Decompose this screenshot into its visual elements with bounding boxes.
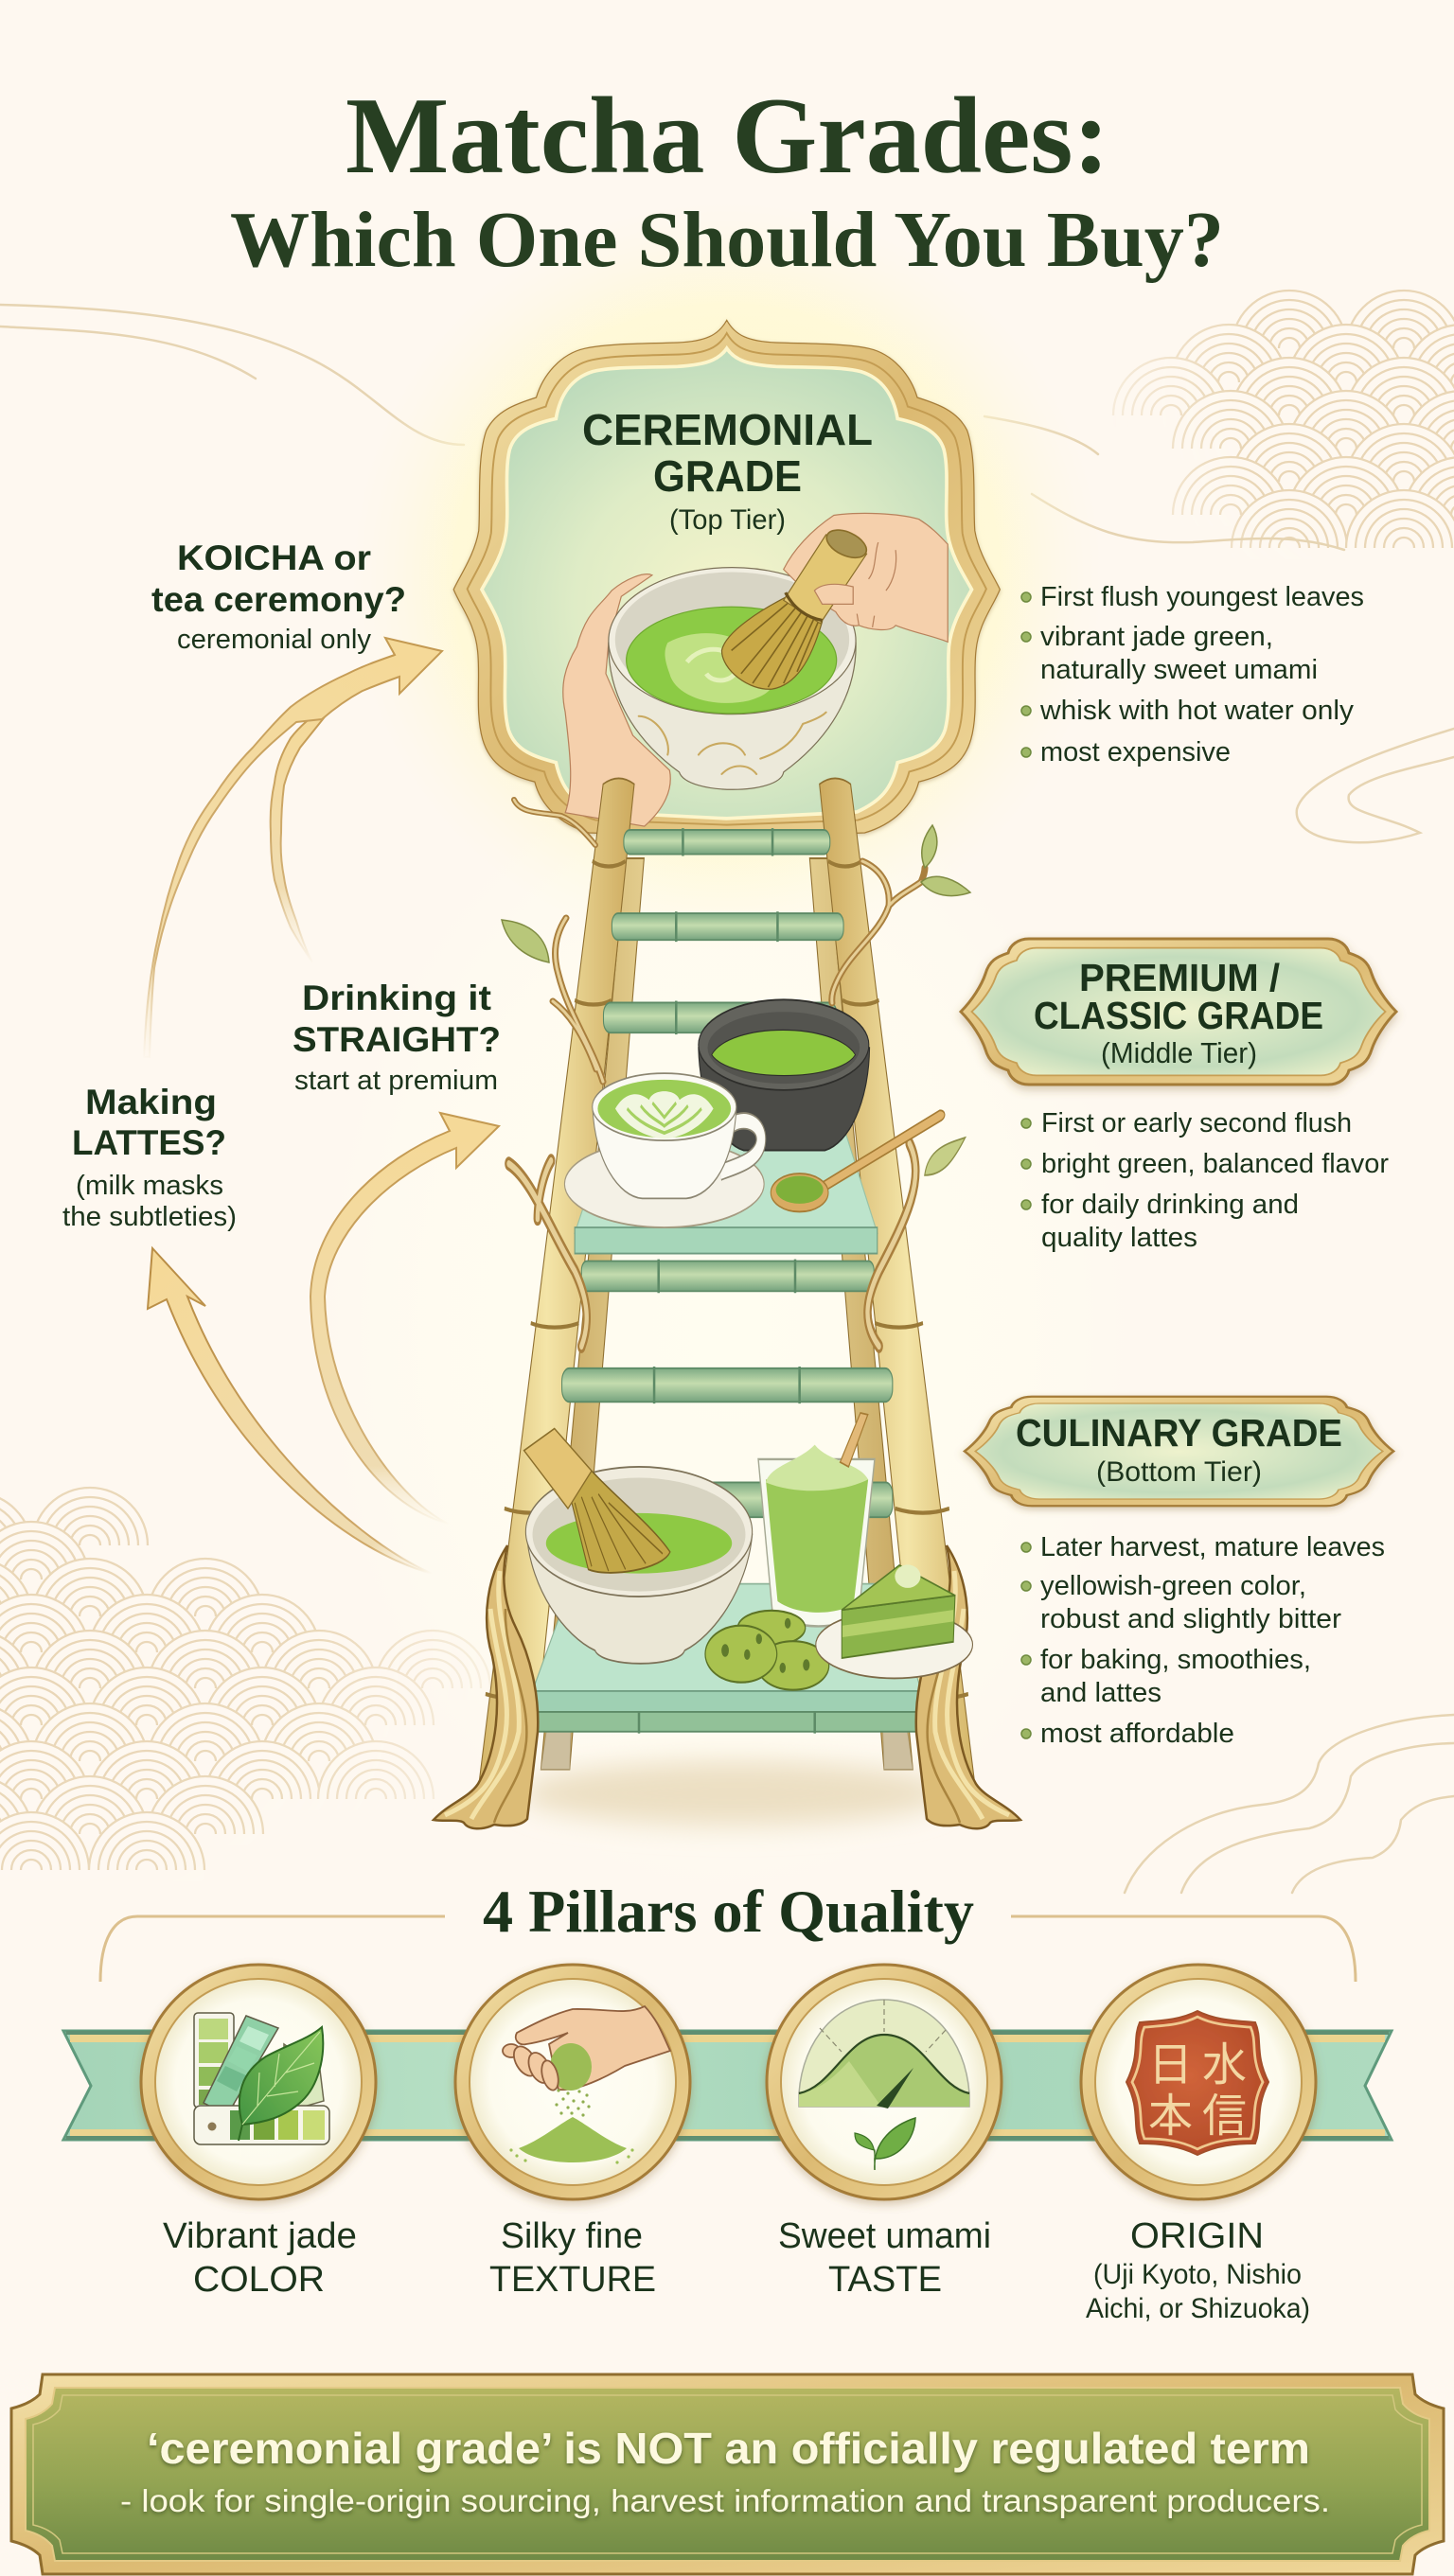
smoothie glass — [758, 1413, 875, 1626]
callout: koicha: KOICHA or — [177, 538, 371, 577]
panel: culinary badge — [965, 1397, 1393, 1506]
pillar: color medallion — [141, 1965, 376, 2199]
ceramic bowl — [609, 568, 856, 789]
title — [230, 76, 1224, 284]
root: left — [434, 1545, 538, 1828]
icon: red origin seal: 水 — [1202, 2040, 1247, 2091]
callout: drinking straight: STRAIGHT? — [293, 1020, 501, 1059]
icon: red origin seal — [1126, 2011, 1268, 2155]
list: ceremonial details: vibrant jade green, — [1040, 622, 1273, 652]
label: silky fine texture: Silky fine — [501, 2216, 643, 2256]
list: culinary details — [1021, 1532, 1385, 1749]
heading: 4 pillars of quality: 4 Pillars of Quality — [483, 1878, 974, 1945]
black tea bowl — [699, 999, 870, 1151]
label: silky fine texture: TEXTURE — [489, 2260, 656, 2300]
icon: taste gauge with leaf — [799, 2000, 969, 2170]
callout: koicha: ceremonial only — [177, 625, 371, 655]
callout: koicha — [151, 538, 406, 655]
back rung behind smoothie — [575, 1482, 893, 1517]
callout: making lattes: Making — [85, 1083, 217, 1121]
heading: ceremonial grade: CEREMONIAL — [582, 405, 873, 454]
wooden spoon with matcha — [771, 1110, 945, 1211]
list: premium details: bright green, balanced flavor — [1041, 1149, 1389, 1179]
flowing lines — [0, 305, 1454, 1893]
cake slice on plate — [816, 1564, 972, 1678]
list: culinary details: most affordable — [1040, 1719, 1234, 1749]
panel: culinary badge: (Bottom Tier) — [1096, 1456, 1262, 1488]
banner: regulation note — [11, 2374, 1444, 2574]
icon: middle leaf — [925, 1138, 966, 1175]
arrow: lattes up to ceremonial — [144, 638, 442, 1057]
label: origin — [1086, 2216, 1310, 2324]
green cookies — [705, 1611, 829, 1690]
icon: hand sprinkling powder — [503, 2006, 670, 2164]
wave pattern: lower left — [0, 1488, 490, 1881]
banner: regulation note: - look for single-origin sourcing, harvest information and transparent producers. — [120, 2483, 1330, 2518]
callout: making lattes: LATTES? — [72, 1123, 226, 1162]
arrow: culinary to straight — [310, 1113, 499, 1524]
vines and leaves: top left — [514, 800, 595, 845]
panel: premium badge: CLASSIC GRADE — [1034, 994, 1323, 1037]
list: ceremonial details: First flush youngest leaves — [1040, 582, 1364, 612]
list: ceremonial details — [1021, 582, 1364, 768]
label: sweet umami taste: Sweet umami — [778, 2216, 991, 2256]
panel: premium badge — [961, 939, 1396, 1085]
list: ceremonial details: most expensive — [1040, 737, 1231, 768]
right hand — [784, 513, 948, 642]
icon: red origin seal: 本 — [1148, 2091, 1193, 2142]
label: silky fine texture — [489, 2216, 656, 2300]
callout: drinking straight: start at premium — [294, 1066, 498, 1096]
list: culinary details: for baking, smoothies, — [1040, 1645, 1311, 1675]
bamboo ladder structure — [475, 778, 979, 1816]
list: culinary details: robust and slightly bitter — [1040, 1604, 1341, 1634]
rails: right — [809, 778, 979, 1816]
list: premium details: for daily drinking and — [1041, 1190, 1299, 1220]
callout: drinking straight — [293, 979, 501, 1096]
glow behind ceremonial frame — [348, 199, 1106, 956]
title: Matcha Grades: — [346, 76, 1109, 196]
illustration: hands whisking matcha bowl — [563, 513, 948, 826]
panel: premium badge: (Middle Tier) — [1101, 1036, 1257, 1069]
rung 3 — [603, 1001, 837, 1034]
callout: making lattes — [62, 1083, 237, 1232]
arrow: culinary to lattes — [148, 1248, 433, 1574]
wave pattern: top right — [1113, 291, 1454, 559]
label: origin: (Uji Kyoto, Nishio — [1093, 2259, 1302, 2290]
icon: red origin seal: 信 — [1202, 2091, 1247, 2142]
culinary bowl with whisk — [524, 1428, 753, 1664]
heading: ceremonial grade: (Top Tier) — [669, 504, 786, 536]
rung 4 — [581, 1260, 874, 1293]
list: premium details: quality lattes — [1041, 1223, 1197, 1253]
icon: swatch fan and leaf — [194, 2013, 329, 2144]
root: right — [916, 1545, 1020, 1828]
rung 2 — [612, 911, 843, 942]
pillar: origin medallion — [1081, 1965, 1316, 2199]
list: premium details: First or early second flush — [1041, 1108, 1352, 1138]
icon: red origin seal: 日 — [1148, 2040, 1193, 2091]
ladder food items — [524, 999, 972, 1690]
panel: premium badge: PREMIUM / — [1079, 956, 1280, 999]
ribbon — [63, 2031, 1392, 2140]
title: Which One Should You Buy? — [230, 196, 1224, 284]
callout: making lattes: (milk masks — [76, 1171, 223, 1201]
left hand — [563, 574, 670, 826]
callout: koicha: tea ceremony? — [151, 580, 406, 619]
rails: left — [475, 778, 644, 1816]
list: premium details — [1021, 1108, 1389, 1253]
label: vibrant jade color — [163, 2216, 357, 2300]
panel: culinary badge: CULINARY GRADE — [1016, 1411, 1342, 1455]
list: ceremonial details: whisk with hot water only — [1039, 696, 1355, 726]
callout: making lattes: the subtleties) — [62, 1202, 237, 1232]
bamboo whisk — [721, 524, 871, 689]
vines: middle — [508, 1143, 915, 1347]
pale glow behind ladder — [310, 738, 1144, 1912]
label: vibrant jade color: Vibrant jade — [163, 2216, 357, 2256]
finger — [814, 584, 853, 604]
label: vibrant jade color: COLOR — [193, 2260, 325, 2300]
label: origin: ORIGIN — [1130, 2216, 1264, 2256]
upper shelf — [575, 1132, 878, 1254]
label: sweet umami taste — [778, 2216, 991, 2300]
rung 1 — [624, 828, 830, 856]
list: culinary details: and lattes — [1040, 1678, 1161, 1708]
heading: ceremonial grade — [582, 405, 873, 536]
banner: regulation note: ‘ceremonial grade’ is NOT an officially regulated term — [147, 2424, 1310, 2473]
bracket lines — [100, 1916, 1356, 1982]
pillar: taste medallion — [767, 1965, 1002, 2199]
latte cup on saucer — [564, 1073, 764, 1227]
ladder ground shadow — [521, 1761, 947, 1826]
list: culinary details: Later harvest, mature leaves — [1040, 1532, 1385, 1562]
label: origin: Aichi, or Shizuoka) — [1086, 2293, 1310, 2324]
heading: ceremonial grade: GRADE — [653, 451, 802, 501]
panel: ceremonial grade frame — [453, 320, 1000, 838]
callout: drinking straight: Drinking it — [302, 979, 491, 1017]
lower shelf — [532, 1584, 921, 1734]
rung 5 — [562, 1367, 893, 1403]
vines and leaves: left with leaf — [502, 918, 603, 1082]
vines and leaves: right with two leaves — [832, 825, 970, 1003]
label: sweet umami taste: TASTE — [828, 2260, 942, 2300]
list: culinary details: yellowish-green color, — [1040, 1571, 1306, 1601]
list: ceremonial details: naturally sweet umami — [1040, 655, 1318, 685]
pillar: texture medallion — [455, 1965, 690, 2199]
